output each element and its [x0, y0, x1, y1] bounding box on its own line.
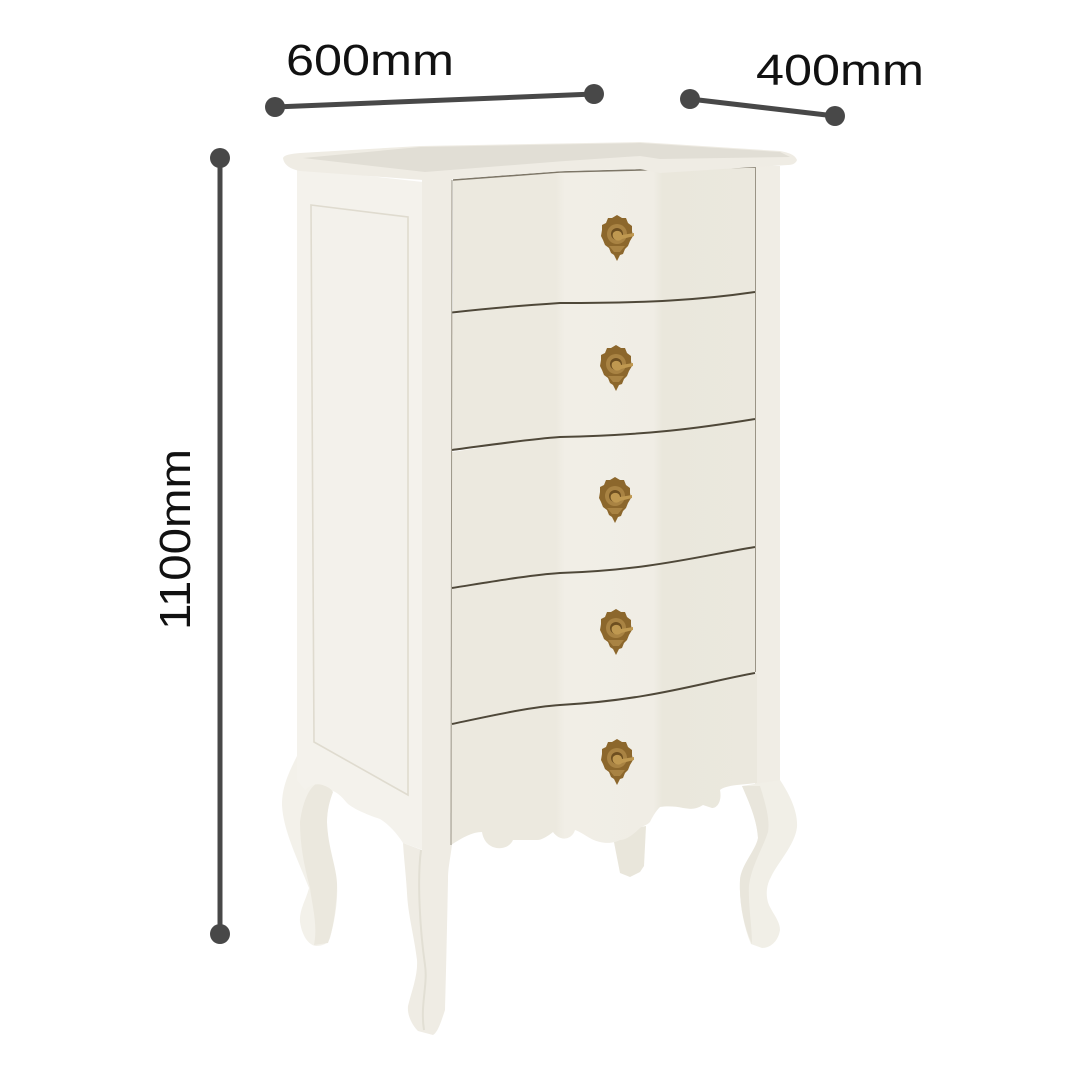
drawer 3	[452, 420, 755, 587]
drawer 2	[452, 293, 755, 450]
dimension: height 1100mm: 1100mm	[151, 449, 200, 630]
dimension: width 600mm	[265, 36, 604, 117]
back right leg	[612, 826, 646, 877]
drawer 5	[451, 674, 757, 848]
dimension: width 600mm: 600mm	[286, 36, 454, 85]
drawer shadow lines	[452, 167, 755, 724]
dimension: depth 400mm: 400mm	[756, 46, 924, 95]
right front leg	[740, 780, 797, 948]
handles	[601, 215, 634, 261]
chest of drawers	[282, 142, 797, 1035]
side panel	[297, 168, 423, 850]
drawer side gaps	[451, 167, 756, 845]
front corner post and front leg	[403, 178, 452, 1035]
left rear leg inner face	[300, 782, 337, 945]
right front leg inner face	[740, 786, 769, 944]
drawers	[451, 167, 757, 848]
right post	[755, 166, 780, 788]
dimension: depth 400mm	[680, 46, 924, 126]
top grey inset	[303, 143, 790, 172]
dimension: height 1100mm	[151, 148, 230, 944]
drawer 1	[453, 167, 755, 312]
top surface	[283, 142, 797, 180]
left rear leg	[282, 750, 337, 946]
side recessed panel	[311, 205, 408, 795]
front leg shading	[419, 850, 426, 1030]
drawer 4	[452, 548, 755, 723]
